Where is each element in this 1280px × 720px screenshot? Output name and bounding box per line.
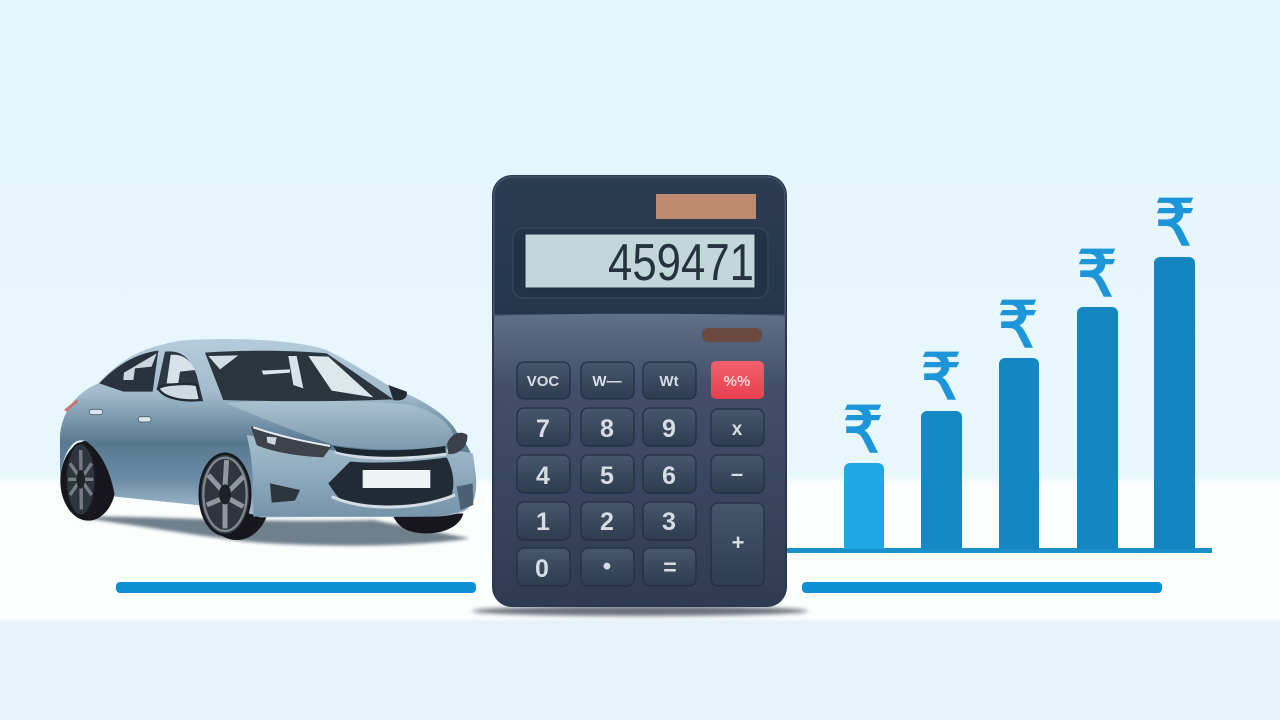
car fog lamp <box>270 483 300 503</box>
calculator body <box>492 175 787 607</box>
key plus <box>711 503 764 586</box>
car side windows <box>99 351 158 392</box>
rupee symbol 1: ₹ <box>843 394 883 466</box>
rupee symbol 5: ₹ <box>1155 187 1195 259</box>
right baseline bar <box>802 582 1162 593</box>
rupee symbol 2: ₹ <box>921 341 961 413</box>
key 9: 9 <box>662 415 676 443</box>
key VOC: VOC <box>527 373 559 390</box>
chart axis <box>787 548 1212 553</box>
key 8: 8 <box>600 415 614 443</box>
bar 2 <box>921 411 962 549</box>
car ground shadow <box>73 516 470 546</box>
LCD readout: 459471 <box>608 234 754 292</box>
car front grille <box>328 457 453 505</box>
car chrome trim <box>332 452 455 507</box>
display frame <box>513 228 768 298</box>
car hood shadow line <box>333 446 446 457</box>
key equals <box>643 548 696 586</box>
key 9 <box>643 408 696 446</box>
car number plate <box>363 470 430 488</box>
car mirrors <box>158 384 200 400</box>
bar 4 <box>1077 307 1118 549</box>
calculator <box>492 175 787 607</box>
small brown indicator <box>702 328 762 342</box>
key minus <box>711 455 764 493</box>
key 3 <box>643 502 696 540</box>
calculator upper housing <box>494 177 785 315</box>
key 7 <box>517 408 570 446</box>
rupee symbol 3: ₹ <box>998 289 1038 361</box>
key VOC <box>517 362 570 399</box>
car front wheel <box>200 454 250 535</box>
car headlights <box>251 426 467 457</box>
bar 3 <box>999 358 1039 549</box>
key equals: = <box>663 554 677 580</box>
key W-: W— <box>592 373 622 390</box>
car door handles and tail light <box>64 399 151 422</box>
car front corner vent <box>457 483 473 510</box>
car front bumper <box>247 435 476 517</box>
left baseline bar <box>116 582 476 593</box>
car tyres <box>60 441 463 540</box>
car body shell <box>60 339 476 517</box>
key 5: 5 <box>600 462 614 490</box>
key dot <box>581 548 634 586</box>
car windscreen <box>205 351 393 401</box>
car rear wheel <box>66 443 95 515</box>
key 2: 2 <box>600 508 614 536</box>
car hood <box>227 400 453 450</box>
key red: %% <box>724 373 750 390</box>
key Wt: Wt <box>659 373 679 390</box>
keypad <box>517 361 764 586</box>
key 5 <box>581 455 634 493</box>
bar chart with rupee symbols <box>787 187 1212 553</box>
key 6: 6 <box>662 462 676 490</box>
key 2 <box>581 502 634 540</box>
key dot: • <box>603 553 611 580</box>
rupee symbol 4: ₹ <box>1077 238 1117 310</box>
calculator shadow <box>472 606 808 616</box>
key 8 <box>581 408 634 446</box>
key W- <box>581 362 634 399</box>
bar 5 <box>1154 257 1195 549</box>
key 4 <box>517 455 570 493</box>
key minus: – <box>731 461 743 486</box>
car illustration <box>60 339 476 546</box>
key 6 <box>643 455 696 493</box>
key Wt <box>643 362 696 399</box>
key 0 <box>517 548 570 586</box>
key 3: 3 <box>662 508 676 536</box>
bar 1 <box>844 463 884 549</box>
key X <box>711 409 764 446</box>
key X: x <box>732 419 743 440</box>
key 7: 7 <box>536 415 550 443</box>
LCD screen <box>525 234 755 288</box>
key 0: 0 <box>535 555 549 583</box>
key red <box>711 361 764 399</box>
key 1: 1 <box>536 508 550 536</box>
calculator lower panel <box>494 314 785 605</box>
solar panel <box>656 194 756 219</box>
key 1 <box>517 502 570 540</box>
key plus: + <box>732 530 744 555</box>
key 4: 4 <box>536 462 550 490</box>
